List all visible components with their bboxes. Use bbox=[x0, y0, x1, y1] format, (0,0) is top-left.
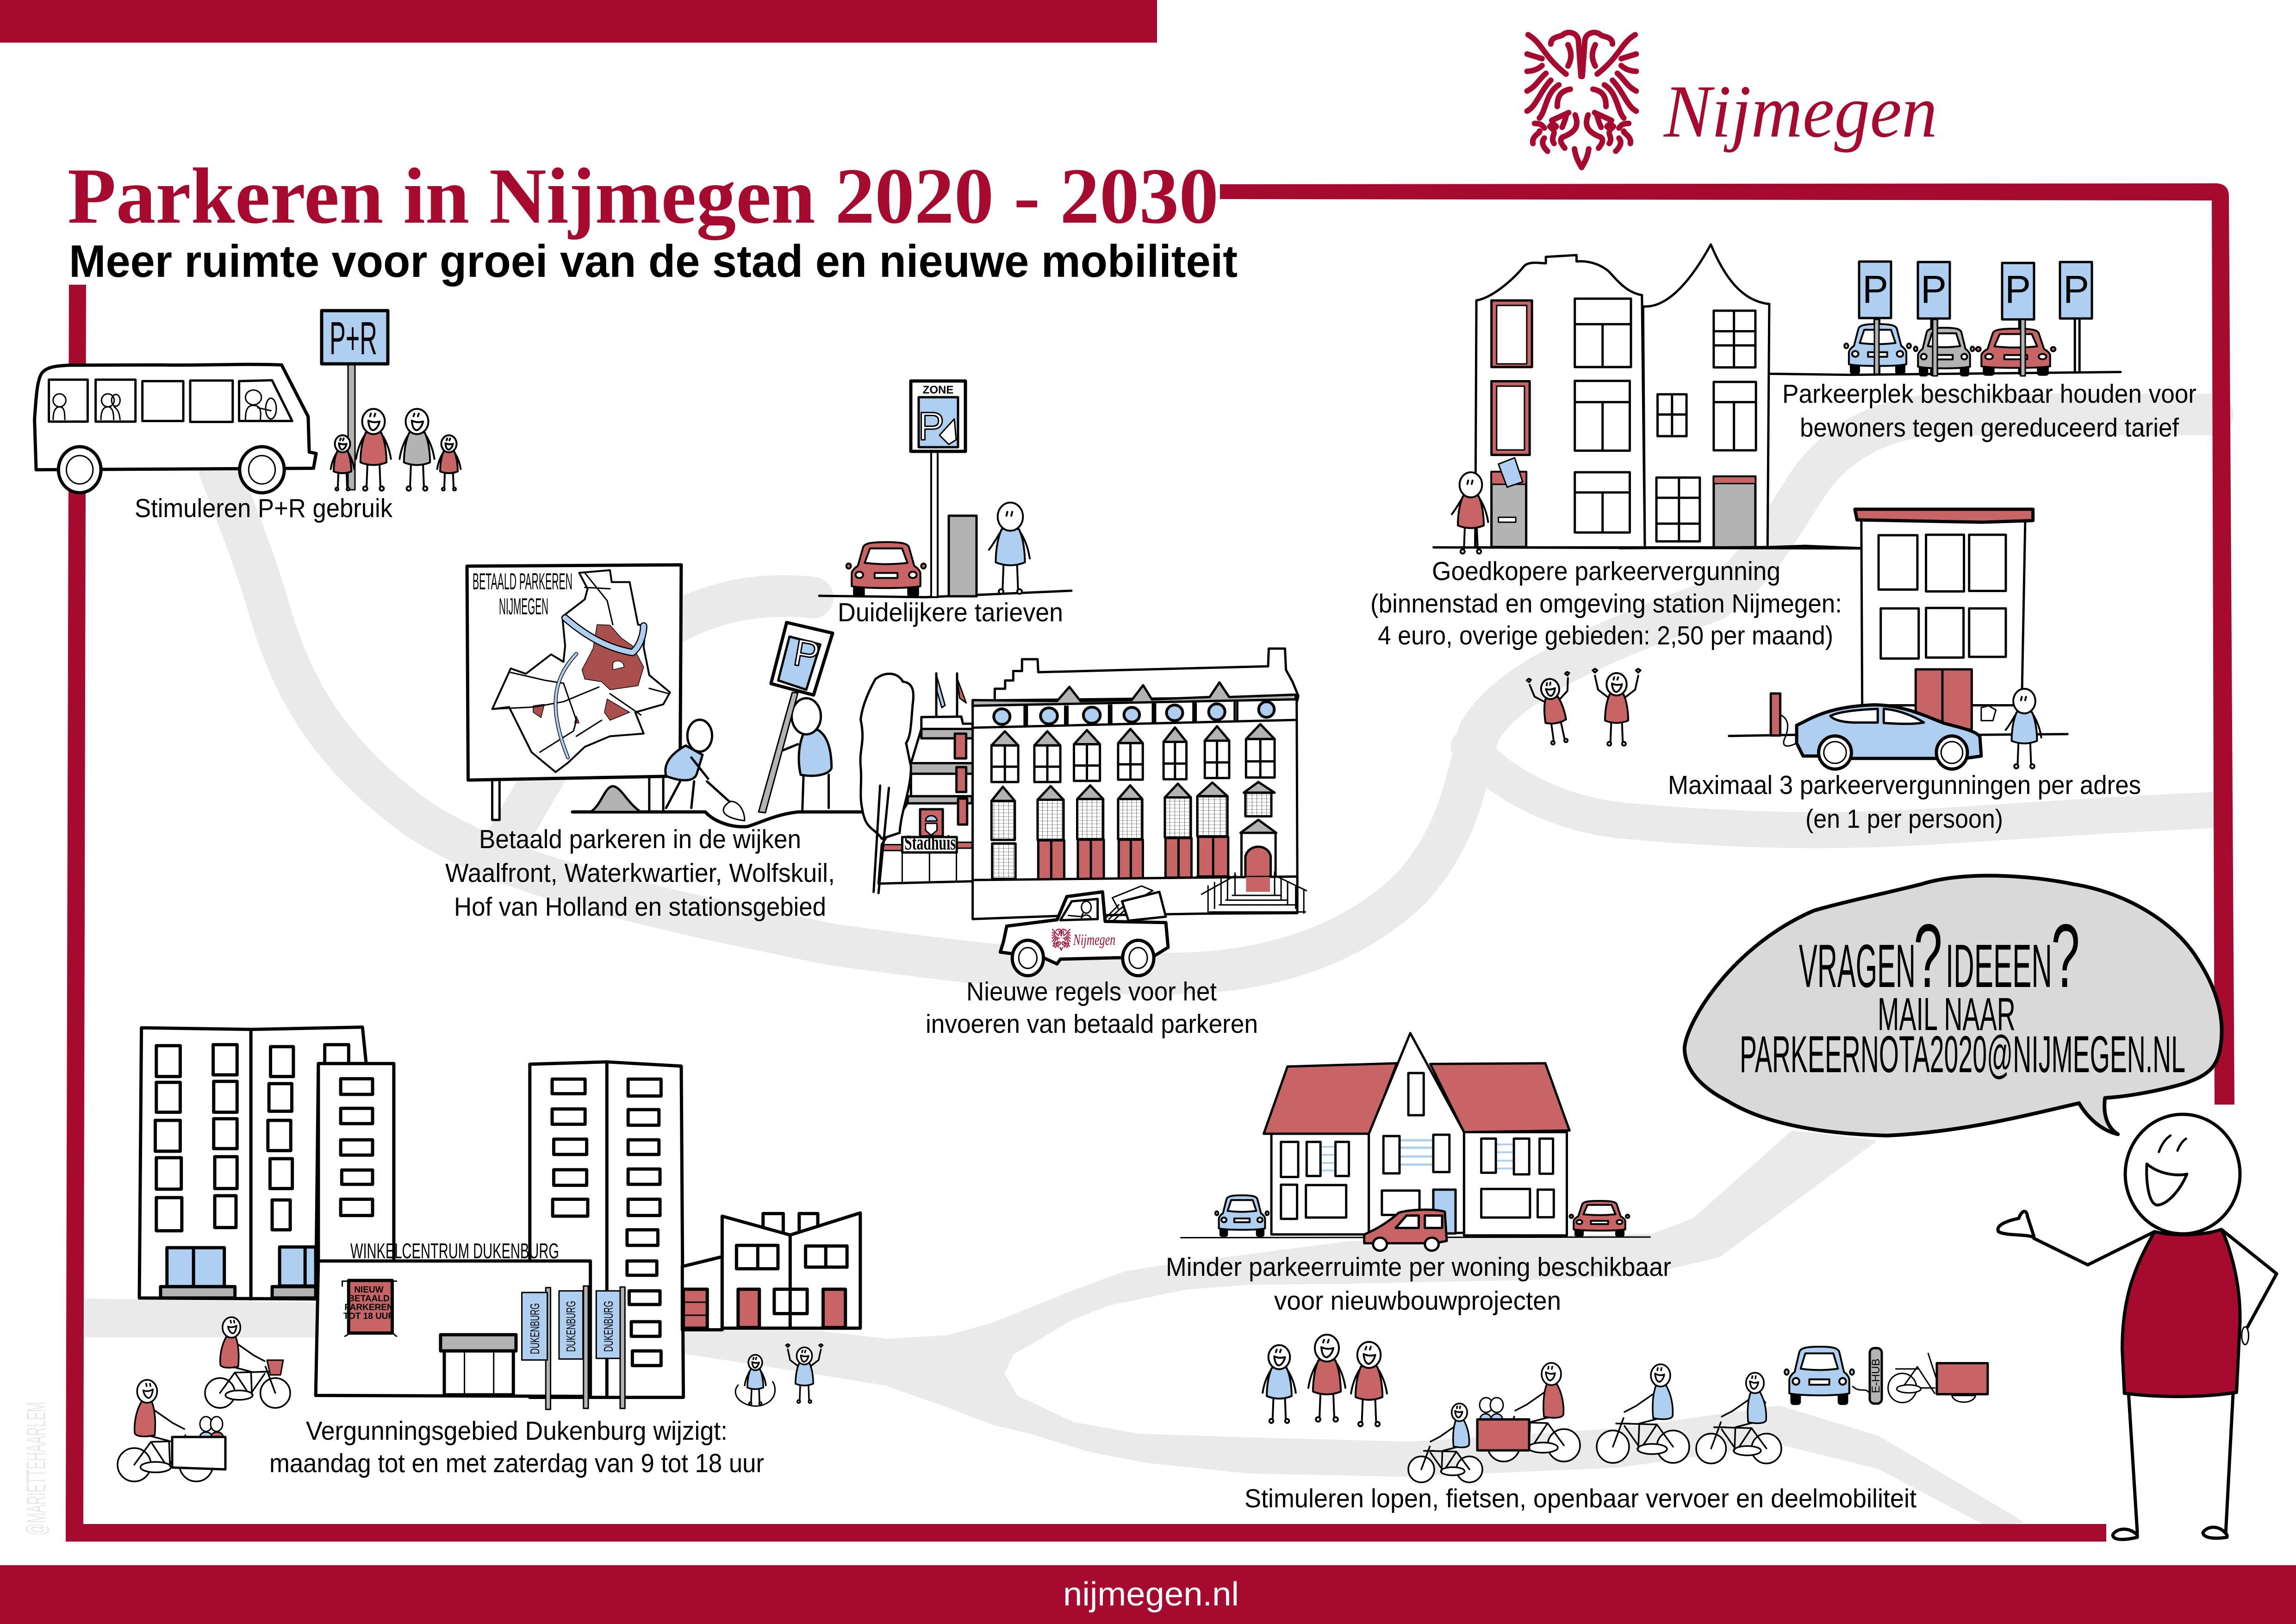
person at kiosk bbox=[989, 503, 1030, 594]
scene: betaald parkeren map bbox=[445, 565, 865, 922]
scene: speech bubble and presenter bbox=[1685, 875, 2277, 1539]
mall name: WINKELCENTRUM DUKENBURG bbox=[350, 1239, 559, 1263]
top decorative bar bbox=[0, 0, 1157, 43]
logo: Nijmegen bbox=[1527, 32, 1937, 168]
label line 2: bewoners tegen gereduceerd tarief bbox=[1800, 413, 2179, 443]
flag lettering: DUKENBURG bbox=[601, 1301, 616, 1352]
charging pole bbox=[1771, 693, 1780, 736]
pay kiosk bbox=[949, 516, 977, 596]
red cyclist with basket bbox=[205, 1317, 290, 1408]
label line 1: Minder parkeerruimte per woning beschikbaar bbox=[1166, 1252, 1671, 1282]
canal house left bbox=[1475, 255, 1645, 547]
banner text: NIEUW bbox=[354, 1285, 384, 1295]
apartment building bbox=[1855, 509, 2033, 730]
permit label line 3: 4 euro, overige gebieden: 2,50 per maand) bbox=[1378, 621, 1833, 650]
held sign lettering: P bbox=[790, 631, 823, 677]
label: Stimuleren lopen, fietsen, openbaar vervoer en deelmobiliteit bbox=[1244, 1484, 1916, 1513]
text: @MARIETTEHAARLEM bbox=[21, 1402, 51, 1536]
mall bbox=[316, 1261, 591, 1396]
parking signs P: P bbox=[1921, 268, 1947, 311]
zone parking sign bbox=[911, 381, 965, 597]
red side car bbox=[1364, 1210, 1447, 1251]
terraced houses bbox=[682, 1213, 860, 1330]
jumping kids bbox=[1526, 669, 1641, 747]
P+R sign bbox=[322, 311, 388, 490]
scene: new-build house bbox=[1166, 1033, 1671, 1316]
logo wordmark: Nijmegen bbox=[1663, 70, 1937, 153]
label line 3: Hof van Holland en stationsgebied bbox=[454, 892, 826, 922]
scene: winkelcentrum Dukenburg bbox=[118, 1027, 860, 1481]
banner text: PARKEREN bbox=[344, 1303, 393, 1312]
tree bbox=[860, 674, 914, 893]
person digging bbox=[666, 720, 745, 821]
parking signs P: P bbox=[2063, 268, 2089, 311]
e-hub charging post bbox=[1853, 1348, 1882, 1404]
bubble line 1: IDEEEN bbox=[1946, 932, 2052, 1000]
apartment block left bbox=[139, 1027, 366, 1299]
jump rope bbox=[735, 1382, 775, 1406]
label line 2: (en 1 per persoon) bbox=[1805, 804, 2003, 834]
main building bbox=[973, 649, 1307, 919]
blue car bbox=[1797, 705, 1981, 769]
parking permit paper bbox=[1499, 458, 1523, 487]
parked cars bbox=[1215, 1195, 1629, 1236]
red car bbox=[846, 542, 926, 596]
person with permit bbox=[1452, 472, 1488, 554]
title: Parkeren in Nijmegen 2020 - 2030 bbox=[68, 152, 1219, 240]
icon: Nijmegen emblem bbox=[1527, 32, 1636, 168]
left wing bbox=[878, 674, 973, 884]
banner text bbox=[343, 1285, 395, 1321]
truck wordmark: Nijmegen bbox=[1073, 931, 1115, 949]
label: P+R: Stimuleren P+R gebruik bbox=[135, 493, 392, 523]
cyclist with backpack bbox=[1696, 1373, 1781, 1463]
zone parking sign: ZONE bbox=[923, 384, 953, 396]
label line 2: Waalfront, Waterkwartier, Wolfskuil, bbox=[445, 858, 835, 888]
icon: emblem on truck bbox=[1052, 929, 1070, 950]
e-hub charging post: E-HUB bbox=[1870, 1359, 1882, 1393]
banner text: TOT 18 UUR bbox=[343, 1312, 395, 1321]
flag lettering bbox=[528, 1301, 616, 1354]
pickup truck bbox=[1000, 886, 1168, 976]
kids playing bbox=[745, 1344, 823, 1405]
scene: walking, cycling, shared mobility bbox=[1244, 1335, 1988, 1513]
post over cars bbox=[1874, 319, 2025, 376]
scene: bus and P+R bbox=[35, 311, 460, 523]
flag lettering: DUKENBURG bbox=[564, 1301, 578, 1352]
scene: apartment with electric car bbox=[1620, 509, 2141, 834]
roofs and walls bbox=[1263, 1033, 1569, 1236]
footer bar bbox=[0, 1565, 2296, 1624]
flag lettering: DUKENBURG bbox=[528, 1303, 542, 1354]
towers bbox=[318, 1062, 684, 1397]
bubble line 1: ? bbox=[2051, 906, 2080, 1006]
grey road network bbox=[86, 414, 2215, 1524]
bubble line 1: VRAGEN bbox=[1799, 932, 1916, 1000]
flag poles and banners bbox=[522, 1286, 625, 1409]
family of four bbox=[331, 409, 460, 491]
person holding sign bbox=[759, 623, 833, 813]
shared cargo bike bbox=[1888, 1354, 1988, 1403]
bus bbox=[35, 364, 316, 493]
child cyclist bbox=[1408, 1404, 1482, 1482]
scene: stadhuis bbox=[860, 649, 1307, 1039]
canal house right bbox=[1643, 244, 1769, 547]
scene: betaald parkeren map: NIJMEGEN bbox=[499, 593, 548, 619]
cargo bike with children bbox=[118, 1380, 225, 1481]
permit label line 1: Goedkopere parkeervergunning bbox=[1432, 556, 1780, 586]
bubble line 1 bbox=[1799, 906, 2080, 1006]
banner text: BETAALD bbox=[348, 1294, 390, 1304]
scene: canal houses and parking bbox=[1370, 244, 2196, 650]
P+R sign: P+R bbox=[330, 312, 377, 364]
permit label line 2: (binnenstad en omgeving station Nijmegen: bbox=[1370, 589, 1842, 618]
label: tarieven: Duidelijkere tarieven bbox=[838, 598, 1063, 627]
money in hand bbox=[1981, 706, 1996, 721]
bubble line 2: MAIL NAAR bbox=[1878, 988, 2016, 1040]
label line 2: maandag tot en met zaterdag van 9 tot 18 uur bbox=[269, 1449, 764, 1478]
label line 2: invoeren van betaald parkeren bbox=[926, 1009, 1258, 1039]
parking signs P: P bbox=[2005, 268, 2031, 311]
cargo bike with kids bbox=[1477, 1363, 1580, 1462]
zone parking sign: P bbox=[918, 405, 944, 449]
person with money bbox=[2006, 689, 2041, 768]
street cars bbox=[1844, 324, 2055, 375]
adult cyclist bbox=[1597, 1364, 1689, 1463]
label line 1: Betaald parkeren in de wijken bbox=[479, 824, 801, 854]
label line 1: Nieuwe regels voor het bbox=[966, 977, 1217, 1006]
speech bubble bbox=[1685, 875, 2222, 1136]
frame: red border around content bbox=[66, 183, 2234, 1542]
walkers bbox=[1263, 1335, 1387, 1426]
label line 1: Parkeerplek beschikbaar houden voor bbox=[1782, 379, 2196, 409]
bubble line 1: ? bbox=[1914, 906, 1942, 1006]
parking sign posts bbox=[1875, 317, 2079, 375]
blue shared car bbox=[1785, 1347, 1854, 1404]
scene: duidelijkere tarieven bbox=[819, 381, 1071, 627]
footer url: nijmegen.nl bbox=[1063, 1576, 1239, 1613]
label line 2: voor nieuwbouwprojecten bbox=[1274, 1286, 1561, 1316]
mound of earth bbox=[591, 786, 641, 812]
presenter figure bbox=[1998, 1114, 2277, 1539]
label line 1: Maximaal 3 parkeervergunningen per adres bbox=[1668, 770, 2141, 800]
subtitle: Meer ruimte voor groei van de stad en nieuwe mobiliteit bbox=[69, 236, 1238, 287]
stadhuis name sign: Stadhuis bbox=[904, 831, 956, 854]
parking signs P: P bbox=[1862, 268, 1888, 311]
scene: betaald parkeren map: BETAALD PARKEREN bbox=[473, 568, 572, 594]
label line 1: Vergunningsgebied Dukenburg wijzigt: bbox=[306, 1416, 728, 1446]
parking signs P bbox=[1859, 262, 2092, 319]
ground line bbox=[819, 591, 1071, 597]
